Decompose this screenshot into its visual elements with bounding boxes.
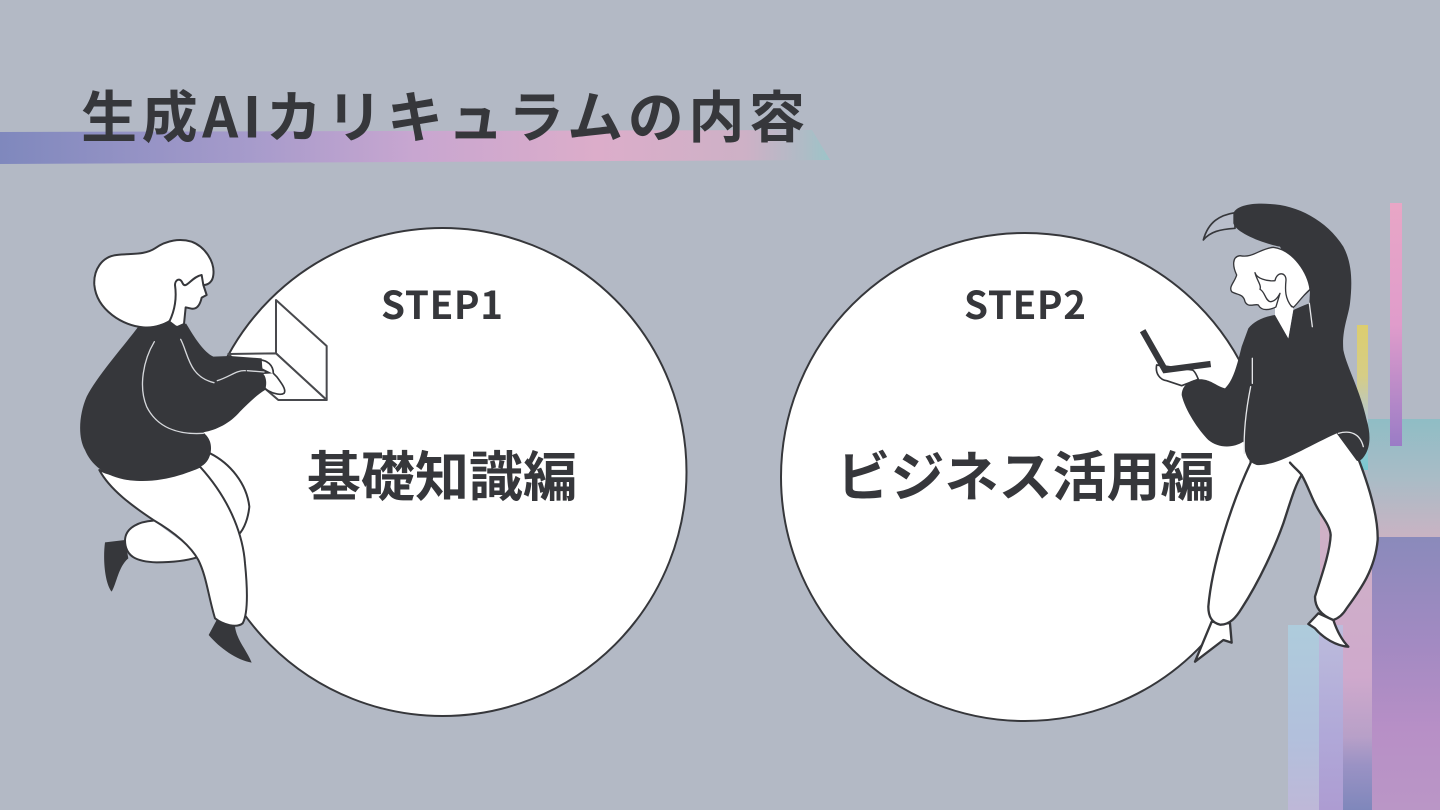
rear thigh outline [125, 521, 197, 562]
sweater seams [143, 339, 264, 434]
step 2 label: STEP2 [964, 275, 1086, 331]
illustration: woman with laptop [80, 240, 327, 663]
step 1 heading: 基礎知識編 [307, 433, 577, 512]
neck [1275, 300, 1293, 338]
step 1 label: STEP1 [381, 275, 503, 331]
neck fill over hair outline [1275, 303, 1293, 337]
laptop [228, 300, 327, 400]
title: 生成AIカリキュラムの内容 [81, 74, 805, 154]
sweater seams [1244, 303, 1363, 453]
rear shoe [104, 540, 128, 592]
circle: step 2 [781, 233, 1269, 721]
title gradient band [0, 130, 830, 164]
face details [1255, 273, 1292, 307]
circle: step 1 [198, 228, 686, 716]
sweater and ponytail [1182, 204, 1369, 465]
step 2 heading: ビジネス活用編 [836, 433, 1214, 512]
sweater [80, 321, 272, 481]
decorative gradient bars [1288, 203, 1440, 810]
illustration: woman holding tablet [1143, 204, 1378, 662]
rear thigh [125, 521, 197, 562]
hands [260, 360, 285, 394]
back leg [210, 453, 249, 535]
light hair [1231, 247, 1310, 310]
face and neck [169, 275, 207, 327]
hair tip [1203, 213, 1235, 240]
front leg [99, 467, 247, 626]
hair [94, 240, 214, 328]
front shoe [209, 620, 252, 663]
tablet hand [1156, 365, 1198, 386]
gap behind neck [1295, 291, 1310, 308]
trousers and shoes [1195, 430, 1378, 662]
tablet [1143, 331, 1211, 370]
